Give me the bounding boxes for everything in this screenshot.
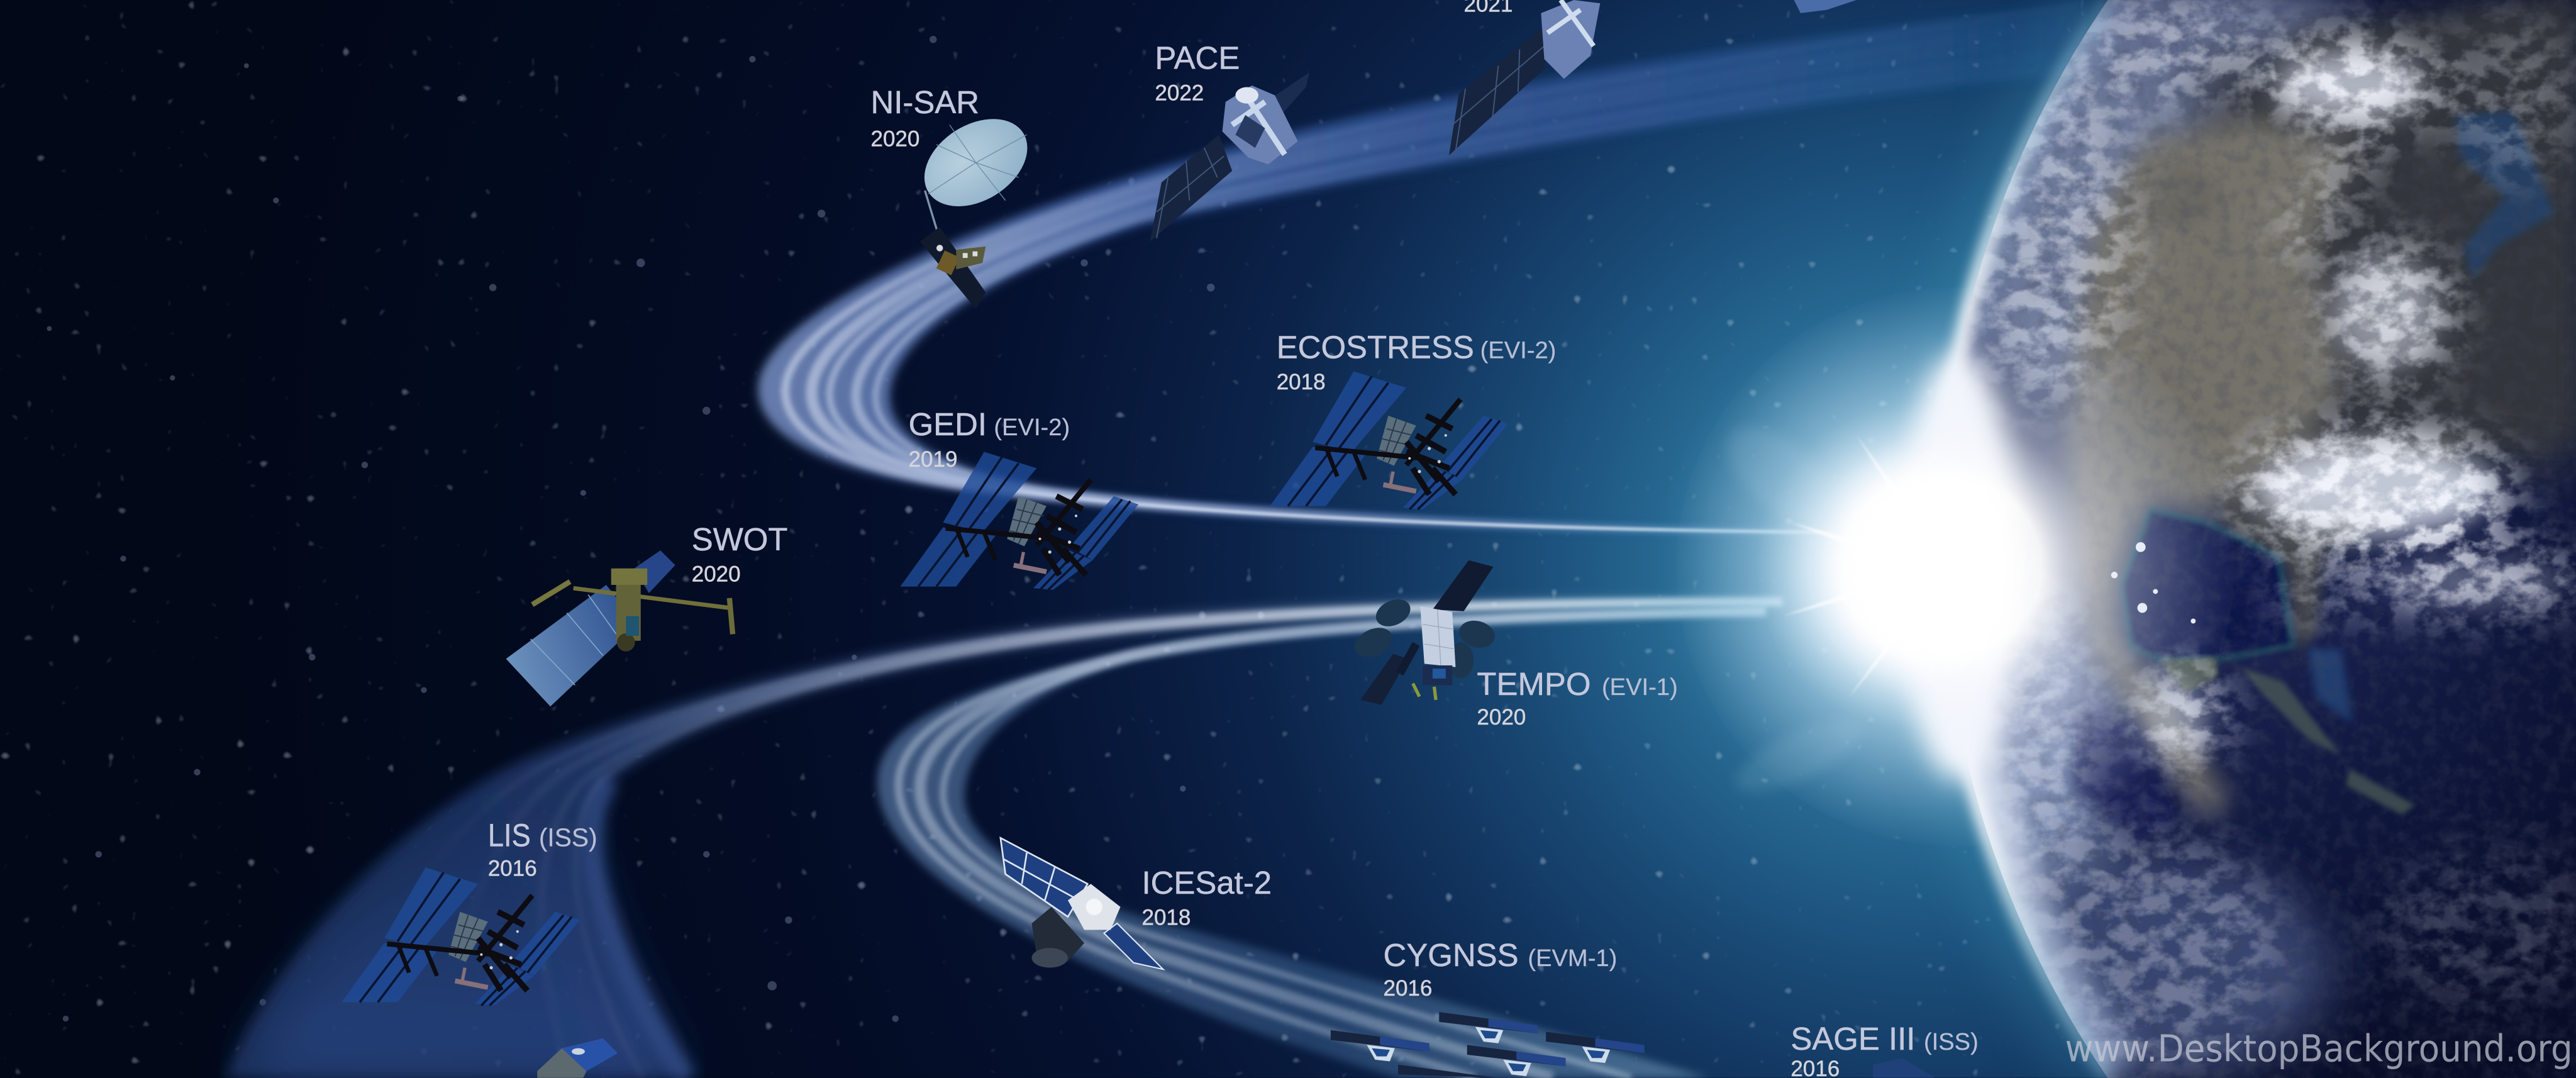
Gulf storm dots: [2111, 542, 2196, 623]
label: GEDI: [909, 406, 1070, 472]
label: NI-SAR: 2020: [870, 126, 919, 151]
shallows: Bahamas: [2308, 649, 2353, 723]
ocean: Pacific near Central America: [2074, 708, 2179, 838]
label: PACE: PACE: [1155, 40, 1240, 76]
label: SAGE III: SAGE III: [1790, 1021, 1915, 1057]
label: ICESat-2: 2018: [1142, 906, 1191, 930]
western cloud wash: [1938, 0, 2358, 1078]
label: TEMPO: TEMPO: [1477, 666, 1591, 702]
orbit ribbon: upper loop: [759, 0, 2087, 532]
label: ECOSTRESS: 2018: [1277, 370, 1326, 394]
satellite: NI-SAR: [909, 101, 1043, 309]
label: ICESat-2: [1142, 865, 1272, 930]
label: LIS: 2016: [488, 856, 537, 881]
sun glow: [1508, 156, 2329, 977]
atmosphere rim: [1941, 0, 2108, 1078]
land: dark north-east: [2256, 0, 2576, 443]
label: CYGNSS: (EVM-1): [1528, 945, 1617, 972]
orbit haze: lower left diffuse blue: [247, 748, 682, 1078]
label: TEMPO: (EVI-1): [1602, 674, 1678, 701]
satellite: ICESat-2: [1001, 838, 1163, 969]
label: LIS: [488, 817, 597, 881]
label: PACE: 2022: [1155, 81, 1204, 105]
label: ECOSTRESS: [1277, 329, 1556, 394]
label: ECOSTRESS: ECOSTRESS: [1277, 329, 1474, 365]
satellites: CYGNSS constellation: [1331, 1012, 1645, 1078]
sun glare over limb: [1675, 0, 2235, 1078]
label: ECOSTRESS: (EVI-2): [1480, 336, 1556, 364]
ocean: Gulf of Mexico: [2121, 509, 2294, 660]
lower limb bright band: [1940, 558, 2108, 1078]
label: GEDI: 2019: [909, 447, 957, 472]
label: CYGNSS: CYGNSS: [1384, 937, 1519, 973]
land underlay: north-east soft mass: [2201, 0, 2576, 542]
label: SAGE III: (ISS): [1924, 1028, 1979, 1055]
land: Cuba and Hispaniola: [2241, 667, 2415, 815]
Earth globe: [1922, 0, 2576, 1078]
satellite: GEDI ISS: [901, 452, 1138, 590]
satellite: LIS ISS: [341, 867, 580, 1006]
label: NI-SAR: [870, 84, 979, 151]
texture: [1922, 0, 2576, 1078]
land: western and central continent: [2067, 118, 2351, 813]
label: GEDI: GEDI: [909, 406, 987, 442]
satellite: top edge fragment: [1794, 0, 1857, 13]
orbit ribbon: lower inner loop: [877, 609, 1766, 1078]
label: SAGE III: [1790, 1021, 1979, 1078]
satellite: PACE: [1150, 72, 1309, 242]
label: SWOT: [692, 521, 788, 587]
label: PACE: [1155, 40, 1240, 105]
satellite: SAGE III ISS fragment: [1873, 1058, 1935, 1078]
atmosphere outer teal glow: [1941, 0, 2108, 1078]
label: NI-SAR: NI-SAR: [870, 84, 979, 120]
satellite: TEMPO: [1350, 560, 1498, 705]
satellite: SWOT: [506, 550, 733, 706]
label: LIS: (ISS): [539, 823, 597, 852]
land: Yucatan: [2158, 657, 2218, 693]
orbit ribbon: lower outer arc: [225, 599, 1782, 1078]
mountain shading: [2119, 164, 2218, 230]
label: CYGNSS: 2016: [1384, 976, 1432, 1001]
satellite: bottom box (SAGE III / lower left): [537, 1038, 618, 1078]
label: TEMPO: [1477, 666, 1678, 730]
satellite: 2021 mission: [1449, 0, 1600, 155]
satellite: ECOSTRESS ISS: [1270, 371, 1508, 509]
land: south-east USA: [2218, 430, 2464, 654]
label: LIS: LIS: [488, 817, 531, 853]
label: SWOT: 2020: [692, 562, 741, 587]
lakes: Great Lakes: [2456, 112, 2555, 279]
soft cloud masses: [2144, 53, 2563, 759]
label: SWOT: SWOT: [692, 521, 788, 557]
cloud detail: [1922, 0, 2576, 1078]
label: CYGNSS: [1384, 937, 1617, 1001]
label: TEMPO: 2020: [1477, 705, 1526, 730]
label: GEDI: (EVI-2): [994, 414, 1070, 441]
label: ICESat-2: ICESat-2: [1142, 865, 1272, 901]
